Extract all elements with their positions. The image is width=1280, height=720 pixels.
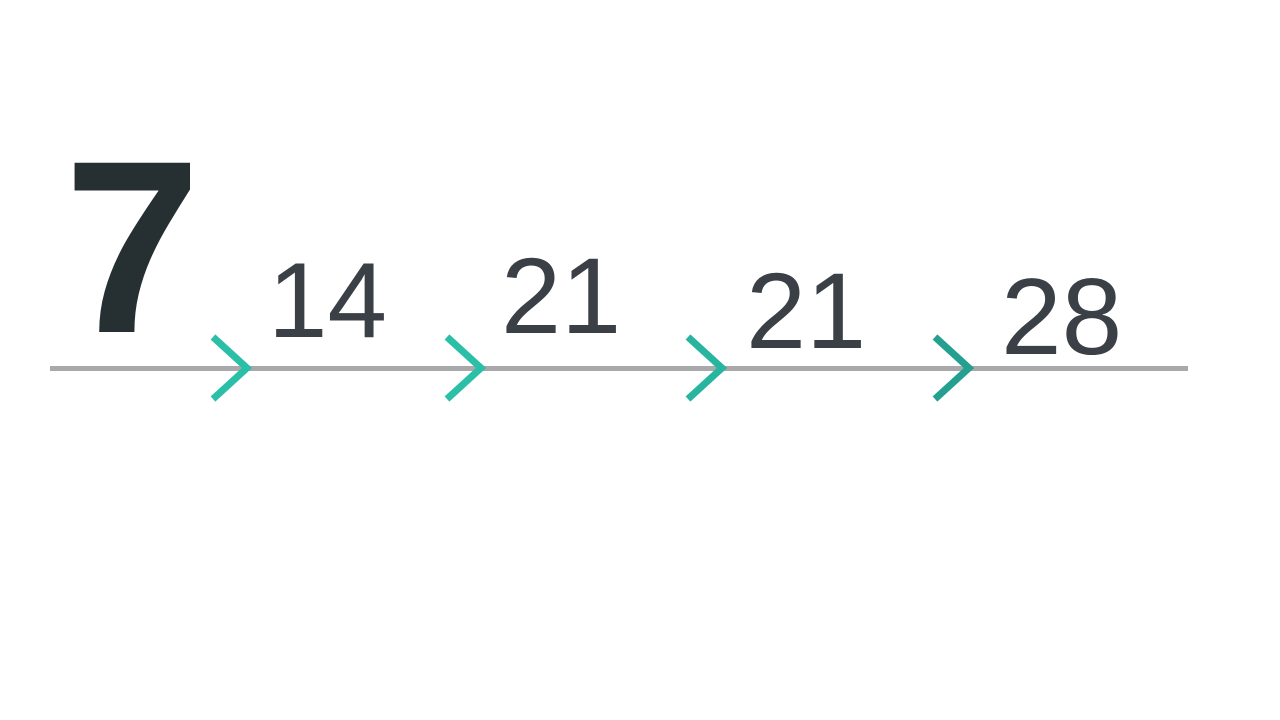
arrow 4 [935,337,969,399]
arrow 1 [213,337,247,399]
timeline line [50,366,1188,371]
number: 7: 7 [64,110,201,385]
number: 21 first: 21 [501,235,621,356]
number: 28: 28 [1001,256,1122,378]
arrow 2 [447,337,481,399]
number: 14: 14 [268,240,387,360]
number: 21 second: 21 [746,250,866,371]
arrow 3 [688,337,722,399]
